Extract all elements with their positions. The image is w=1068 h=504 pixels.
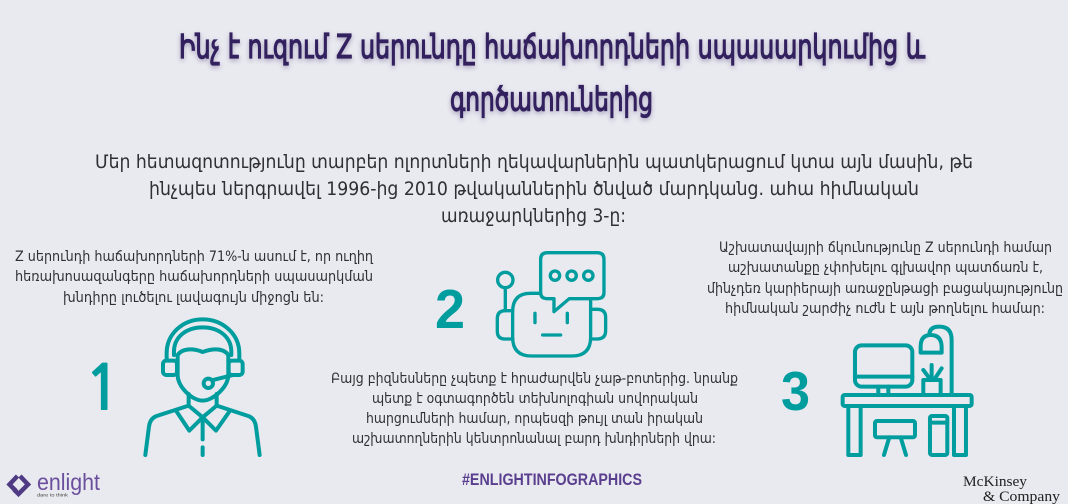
icon: desk with computer and lamp [843,327,972,455]
intro text: առաջարկներից 3-ը: [441,205,626,227]
number 1: 1 [84,359,122,420]
tip 2 text: հարցումների համար, որպեսզի թույլ տան իրական [366,411,703,427]
title: գործատուներից [450,80,653,118]
tip 1 text [15,249,374,306]
logo: McKinsey & Company: McKinsey [963,474,1028,490]
panel: tip 3 [707,240,1063,455]
hashtag: #ENLIGHTINFOGRAPHICS [462,470,642,489]
icon: support agent with headset [145,319,260,455]
intro text: ինչպես ներգրավել 1996-ից 2010 թվականներին ծնված մարդկանց. ահա հիմնական [149,178,919,200]
tip 1 text: խնդիրը լուծելու լավագույն միջոցն են: [63,290,324,306]
tip 2 text: պետք է օգտագործեն տեխնոլոգիան սովորական [372,391,698,407]
tip 2 text: աշխատողներին կենտրոնանալ բարդ խնդիրների վրա: [352,431,716,447]
intro text: Մեր հետազոտությունը տարբեր ոլորտների ղեկավարներին պատկերացում կտա այն մասին, թե [95,151,973,173]
tip 2 text [331,371,738,447]
logo: enlight: dare to think [37,492,69,498]
panel: tip 2 [331,253,738,447]
tip 3 text [707,240,1063,317]
tip 1 text: Z սերունդի հաճախորդների 71%-ն ասում է, որ ուղիղ [15,249,374,265]
intro text [95,151,973,227]
number 3: 3 [781,360,810,422]
logo: enlight [10,469,101,498]
icon: chatbot robot [497,253,606,356]
logo: enlight: enlight [37,469,101,495]
panel: tip 1 [15,249,374,455]
number 2: 2 [435,278,465,340]
title [179,27,925,118]
icon: enlight diamond [10,476,28,494]
logo: McKinsey & Company [963,474,1061,504]
tip 1 text: հեռախոսազանգերը հաճախորդների սպասարկման [15,269,373,285]
tip 2 text: Բայց բիզնեսները չպետք է հրաժարվեն չաթ-բոտերից. նրանք [331,371,738,387]
